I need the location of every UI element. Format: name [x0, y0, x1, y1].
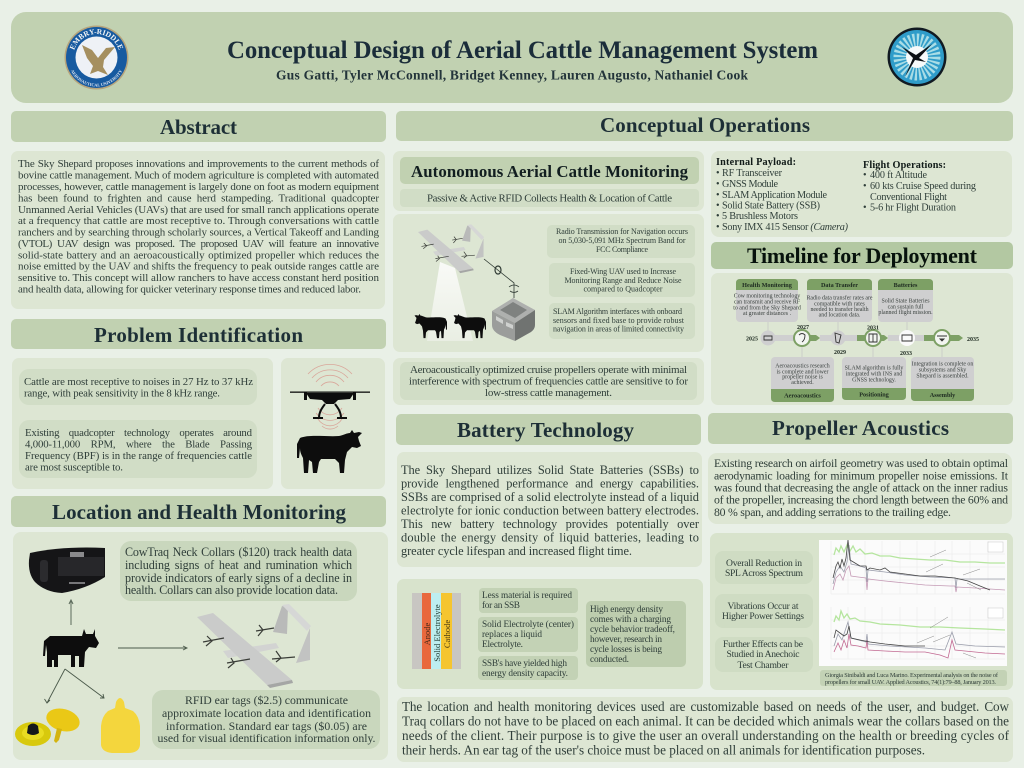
callout: energy density — [478, 656, 578, 680]
callout: SLAM: SLAM Algorithm interfaces with onboard — [553, 307, 682, 316]
milestone: positioning: SLAM algorithm is fully — [845, 364, 903, 372]
year labels: 2025 — [746, 336, 758, 342]
callout: ear tags: RFID ear tags ($2.5) communicate — [185, 693, 348, 707]
text: propeller paragraph: Existing research on airfoil geometry was used to obtain optimal — [714, 456, 1009, 470]
callout: solid electrolyte: Solid Electrolyte (center) — [482, 619, 574, 630]
callout: less material: Less material is required — [482, 591, 572, 601]
callout: SLAM: sensors and fixed base to provide robust — [553, 316, 685, 325]
icon: cow — [43, 629, 99, 667]
icon: quadcopter — [290, 392, 370, 418]
text: abstract paragraph: bovine cattle management. Much of modern agriculture is completed with automated — [18, 170, 380, 182]
text: propeller paragraph — [714, 456, 1009, 519]
callout: ear tags: used for visual identification information only. — [158, 731, 376, 745]
milestone: data transfer: Radio data transfer rates are — [806, 294, 873, 302]
text: abstract paragraph — [18, 158, 380, 296]
logo: Embry-Riddle seal: EMBRY-RIDDLE — [70, 29, 124, 50]
text: battery paragraph — [401, 463, 700, 558]
text: battery paragraph: This new battery technology provides potentially over — [401, 517, 700, 531]
callout: radio transmission — [547, 225, 695, 258]
subheading — [400, 189, 699, 207]
text: propeller note: Aeroacoustically optimized cruise propellers operate with minimal — [410, 364, 687, 376]
callout: charging tradeoff: High energy density — [590, 605, 663, 615]
chart: top spectrum — [831, 540, 1005, 594]
milestone: positioning — [842, 357, 906, 400]
list: flight operations: 5-6 hr Flight Duration — [870, 202, 956, 214]
illustration: radio link — [484, 259, 519, 298]
callout: charging tradeoff: conducted. — [590, 655, 629, 665]
panel: problem illustration — [281, 358, 385, 489]
text: abstract paragraph: sensitive to. This concept will allow ranchers to have access constant herd position — [18, 272, 380, 284]
text: battery paragraph: greater cycle lifespan and increased flight time. — [401, 544, 632, 558]
panel: location heading — [11, 496, 386, 527]
text: abstract paragraph: solid-state battery and an aeroacoustically optimized propeller which reduces the — [18, 249, 379, 261]
panel: abstract heading — [11, 111, 386, 142]
panel: battery diagram — [397, 579, 703, 689]
callout: ear tags: information. Standard ear tags ($0.05) are — [166, 719, 367, 733]
heading: battery technology: Battery Technology — [457, 418, 634, 442]
arrows: cow to ear tags — [44, 669, 104, 703]
text: abstract paragraph: (VTOL) UAV design was proposed. The proposed UAV will feature an innovative — [18, 238, 379, 250]
milestone: health monitoring — [733, 279, 801, 322]
milestone: data transfer: needed to transfer health — [810, 306, 869, 313]
title: Conceptual Design of Aerial Cattle Management System — [227, 37, 818, 64]
callout: fixed wing — [549, 263, 695, 297]
list: internal payload: • — [716, 200, 720, 212]
callout: vibrations — [715, 594, 813, 628]
illustration: sensor beam — [427, 262, 473, 341]
callout: SLAM: navigation in areas of limited connectivity — [553, 324, 684, 334]
text: abstract paragraph: ranchers and by searching through scholarly sources, a Vertical Takeoff and Landing — [18, 226, 380, 238]
milestone: batteries: planned flight mission. — [878, 309, 933, 316]
milestone: assembly: subsystems and Sky — [919, 368, 966, 374]
milestone: aeroacoustics: is complete and lower — [777, 370, 828, 376]
heading: autonomous aerial cattle monitoring — [400, 157, 699, 184]
text: abstract paragraph: processes, however, cattle management is largely done on foot as modern equipment — [18, 181, 379, 193]
callout: radio transmission: FCC Compliance — [596, 245, 648, 254]
text: abstract paragraph: at a frequency that cattle are most receptive to. Through conversations with cattle — [18, 215, 379, 227]
panel: autonomous monitoring — [393, 151, 704, 211]
callout: collars: including signs of heat and rumination which — [125, 558, 352, 572]
text: closing paragraph: their herds. An ear tag of the user's choice must be placed on all animals for identification purposes. — [402, 742, 925, 758]
callout: SPL reduction: Overall Reduction in — [726, 558, 802, 569]
list: internal payload: • — [716, 222, 720, 233]
callout: quadcopter noise: 4,000-11,000 RPM, where the Blade Passing — [25, 439, 253, 451]
chart: bottom spectrum — [831, 607, 1005, 659]
list: internal payload: • — [716, 190, 720, 201]
heading: propeller acoustics: Propeller Acoustics — [772, 416, 949, 440]
milestone: batteries: can sustain full — [888, 304, 924, 310]
milestone: aeroacoustics — [771, 357, 834, 402]
year labels: 2031 — [867, 326, 879, 332]
panel: header — [11, 12, 1013, 103]
milestone: health monitoring: at greater distances . — [743, 311, 792, 317]
milestone: batteries — [878, 279, 933, 322]
list: flight operations — [863, 160, 976, 214]
callout: further effects — [715, 637, 813, 672]
panel: closing note — [397, 697, 1013, 762]
panel: battery text — [397, 452, 702, 567]
panel: payload and flight operations — [711, 151, 1012, 237]
text: abstract paragraph: The Sky Shepard proposes innovations and improvements to the current methods of — [18, 158, 379, 170]
arrow: cow to collar — [69, 600, 73, 625]
milestone: data transfer — [806, 279, 873, 322]
illustration: fixed base station — [492, 298, 535, 341]
callout: radio transmission: Radio Transmission for Navigation occurs — [556, 227, 688, 236]
callout: solid electrolyte: replaces a liquid — [482, 630, 542, 640]
milestone: health monitoring: Health Monitoring — [742, 282, 793, 289]
milestone: assembly: Assembly — [930, 392, 956, 399]
panel: conceptual operations heading — [396, 111, 1013, 141]
milestone: health monitoring: can transmit and receive RF — [734, 300, 801, 306]
callout: less material — [479, 588, 578, 613]
panel: abstract body — [11, 151, 385, 309]
text: closing paragraph: The location and health monitoring devices used are customizable based on needs of the user, and budget. Cow — [402, 699, 1009, 714]
text: battery paragraph: SSBs are comprised of a solid electrolyte instead of a liquid — [401, 490, 700, 504]
icon: neck collar — [29, 548, 105, 593]
list: flight operations: Conventional Flight — [870, 192, 947, 203]
text: battery paragraph: provide lengthened performance and energy capabilities. — [401, 476, 699, 490]
year labels — [746, 325, 979, 357]
list: internal payload: • — [716, 179, 720, 190]
icon: cow — [297, 430, 362, 473]
callout: SPL reduction: SPL Across Spectrum — [725, 568, 804, 579]
year labels: 2033 — [900, 351, 912, 357]
callout: less material: for an SSB — [482, 600, 520, 611]
milestone: batteries: Batteries — [894, 282, 918, 289]
callout: collars: CowTraq Neck Collars ($120) track health data — [125, 545, 353, 559]
diagram: solid state battery layers — [412, 593, 461, 669]
heading: conceptual operations: Conceptual Operations — [600, 113, 810, 137]
text: propeller note: interference with spectrum of frequencies cattle are sensitive to for — [409, 376, 688, 388]
year labels: 2035 — [967, 337, 979, 343]
text: closing paragraph — [402, 699, 1010, 758]
callout: cattle hearing: range, with peak sensitivity in the 8 kHz range. — [24, 388, 220, 400]
heading: abstract: Abstract — [160, 115, 237, 139]
citation — [820, 670, 1007, 686]
callout: charging tradeoff: cycle losses is being — [590, 645, 662, 655]
list: internal payload: Solid State Battery (SSB) — [722, 200, 820, 212]
text: propeller note: low-stress cattle management. — [485, 387, 612, 399]
milestone: data transfer: Data Transfer — [821, 282, 858, 289]
callout: radio transmission: on 5,030-5,091 MHz Spectrum Band for — [558, 236, 686, 245]
callout: further effects: Test Chamber — [738, 660, 789, 671]
callout: quadcopter noise: Frequency (BPF) is in the range of frequencies cattle — [25, 450, 252, 462]
list: flight operations: • — [863, 170, 867, 181]
milestone: aeroacoustics: Aeroacoustics research — [775, 364, 830, 370]
citation: Giorgia Sinibaldi and Luca Marino. Experimental analysis on the noise of — [825, 672, 999, 679]
panel: propeller text — [708, 453, 1012, 524]
illustration: cow one — [414, 314, 447, 338]
panel: timeline heading — [711, 242, 1013, 269]
callout: solid electrolyte — [478, 617, 578, 652]
list: flight operations: • — [863, 202, 867, 214]
callout: collars: provide indicators of early signs of a decline in — [125, 571, 352, 585]
callout: vibrations: Vibrations Occur at — [728, 601, 799, 612]
callout: solid electrolyte: Electrolyte. — [482, 640, 523, 650]
list: internal payload: Internal Payload: — [716, 157, 796, 168]
logo: Embry-Riddle seal — [64, 26, 128, 90]
milestone: positioning: GNSS technology. — [852, 378, 896, 384]
text: propeller paragraph: was found that decreasing the angle of attack on the inner radius — [714, 480, 1008, 494]
milestone: assembly: Integration is complete on — [912, 362, 973, 368]
callout: charging tradeoff: cycle behavior tradeoff, — [590, 624, 675, 635]
milestone: batteries: Solid State Batteries — [881, 298, 930, 304]
list: internal payload: 5 Brushless Motors — [722, 211, 798, 222]
arrow: cow to UAV — [118, 646, 187, 650]
list: internal payload: Sony IMX 415 Sensor (Camera) — [722, 222, 849, 233]
illustration: VTOL UAV — [197, 604, 311, 688]
illustration: UAV — [418, 224, 484, 273]
list: flight operations: • — [863, 181, 867, 192]
milestone: health monitoring: Cow monitoring technology — [734, 294, 800, 300]
milestone: data transfer: and location data. — [819, 312, 861, 318]
list: internal payload: GNSS Module — [722, 179, 778, 190]
text: propeller paragraph: aerodynamic loading for minimum propeller noise emissions. It — [714, 468, 1009, 482]
callout: collars — [120, 541, 357, 601]
panel: propeller results — [710, 533, 1013, 690]
callout: further effects: Studied in Anechoic — [726, 649, 800, 660]
diagram: solid state battery layers: Cathode — [442, 620, 452, 648]
list: internal payload: RF Transceiver — [722, 168, 783, 179]
callout: cattle hearing: Cattle are most receptive to noises in 27 Hz to 37 kHz — [24, 376, 253, 388]
heading: timeline for deployment: Timeline for Deployment — [747, 243, 978, 268]
text: abstract paragraph: Unmanned Aerial Vehicles (UAVs) that are used for small ranch applications operate — [18, 204, 379, 216]
year labels: 2027 — [797, 325, 809, 331]
citation: propellers for small UAV. Applied Acoustics, 74(1):79–88, January 2013. — [825, 679, 996, 686]
callout: fixed wing: Fixed-Wing UAV used to Increase — [570, 267, 676, 276]
diagram: solid state battery layers: Solid Electrolyte — [432, 604, 442, 662]
icon: visual ear tag — [101, 698, 140, 753]
list: flight operations: Flight Operations: — [863, 160, 946, 171]
icon: noise waves — [308, 364, 352, 429]
milestone: health monitoring: to and from the Sky Shepard — [733, 304, 801, 312]
text: battery paragraph: double the energy density of liquid batteries, leading to — [401, 530, 699, 544]
illustration: cow two — [454, 314, 486, 338]
text: battery paragraph: electrolyte for ionic conduction between battery electrodes. — [401, 504, 699, 518]
callout: ear tags: approximate location data and identification — [162, 706, 371, 720]
milestone: positioning: integrated with INS and — [846, 372, 902, 378]
milestone: positioning: Positioning — [859, 392, 890, 398]
subheading: Passive & Active RFID Collects Health & Location of Cattle — [427, 192, 672, 204]
panel: problem heading — [11, 319, 386, 349]
logo: clock compass — [888, 28, 946, 86]
chart: noise spectra — [819, 540, 1007, 666]
milestone: data transfer: compatible with rates — [814, 302, 866, 308]
milestone: aeroacoustics: Aeroacoustics — [784, 392, 821, 400]
callout: charging tradeoff: however, research in — [590, 635, 662, 645]
text: closing paragraph: needs of the client. Their purpose is to give the user an overall understanding on the health or breeding cycles of — [402, 728, 1010, 743]
callout: fixed wing: compared to Quadcopter — [584, 284, 663, 294]
timeline axis — [760, 322, 963, 357]
panel: battery heading — [396, 414, 701, 445]
panel: timeline — [711, 273, 1013, 405]
panel: problem text — [12, 358, 273, 489]
text: abstract paragraph: has been found to frighten and cause herd stampeding. Traditional quadcopter — [18, 192, 379, 204]
list: internal payload: • — [716, 211, 720, 222]
callout: vibrations: Higher Power Settings — [722, 611, 804, 622]
logo: Embry-Riddle seal: AERONAUTICAL UNIVERSITY — [70, 70, 122, 87]
callout: SPL reduction — [715, 551, 813, 584]
callout: charging tradeoff — [586, 601, 686, 667]
callout: energy density: SSB's have yielded high — [482, 659, 567, 669]
text: closing paragraph: Traq collars do not have to be placed on each animal. It can be decided which animals wear the collars based on the — [402, 714, 1009, 728]
panel: propeller heading — [708, 413, 1013, 444]
callout: energy density: energy density capacity. — [482, 669, 568, 679]
list: internal payload: • — [716, 168, 720, 179]
milestone: aeroacoustics: propeller noise is — [782, 374, 823, 380]
panel: propeller note — [393, 358, 704, 405]
callout: ear tags — [152, 690, 380, 749]
callout: quadcopter noise: Existing quadcopter technology operates around — [25, 427, 253, 439]
list: flight operations: 400 ft Altitude — [870, 170, 927, 181]
milestone: assembly — [911, 357, 974, 401]
year labels: 2029 — [834, 350, 846, 356]
text: propeller note — [409, 364, 688, 399]
list: internal payload: SLAM Application Module — [722, 190, 827, 201]
list: internal payload — [716, 157, 849, 233]
callout: further effects: Further Effects can be — [723, 639, 803, 650]
milestone: aeroacoustics: achieved. — [791, 380, 814, 386]
callout: SLAM — [549, 303, 695, 339]
callout: cattle hearing — [19, 369, 257, 405]
panel: location and health — [13, 532, 388, 760]
milestone: assembly: Shepard is assembled. — [916, 374, 969, 380]
callout: charging tradeoff: comes with a charging — [590, 615, 671, 625]
callout: fixed wing: Monitoring Range and Reduce Noise — [564, 276, 682, 285]
panel: system diagram — [393, 214, 704, 352]
text: propeller paragraph: 80 % span, and adding serrations to the trailing edge. — [714, 505, 951, 519]
text: abstract paragraph: noise emitted by the UAV and shifts the frequency to peak outside ranges cattle are — [18, 261, 379, 273]
heading: problem identification: Problem Identification — [94, 323, 303, 347]
icon: RFID ear tag — [15, 705, 82, 746]
diagram: solid state battery layers: Anode — [422, 622, 432, 645]
callout: collars: health. Collars can also provide location data. — [125, 583, 338, 597]
text: propeller paragraph: of the propeller, increasing the chord length between the 60% and — [714, 492, 1008, 506]
authors: Gus Gatti, Tyler McConnell, Bridget Kenney, Lauren Augusto, Nathaniel Cook — [276, 68, 748, 82]
list: flight operations: 60 kts Cruise Speed during — [870, 181, 976, 192]
heading: location and health monitoring: Location and Health Monitoring — [52, 500, 346, 524]
text: battery paragraph: The Sky Shepard utilizes Solid State Batteries (SSBs) to — [401, 463, 699, 477]
text: abstract paragraph: and health data, allowing for quicker veterinary response times and reduced labor. — [18, 284, 361, 296]
callout: quadcopter noise — [19, 420, 257, 478]
callout: quadcopter noise: are most susceptible to. — [25, 462, 123, 474]
heading: autonomous aerial cattle monitoring: Autonomous Aerial Cattle Monitoring — [411, 162, 689, 181]
